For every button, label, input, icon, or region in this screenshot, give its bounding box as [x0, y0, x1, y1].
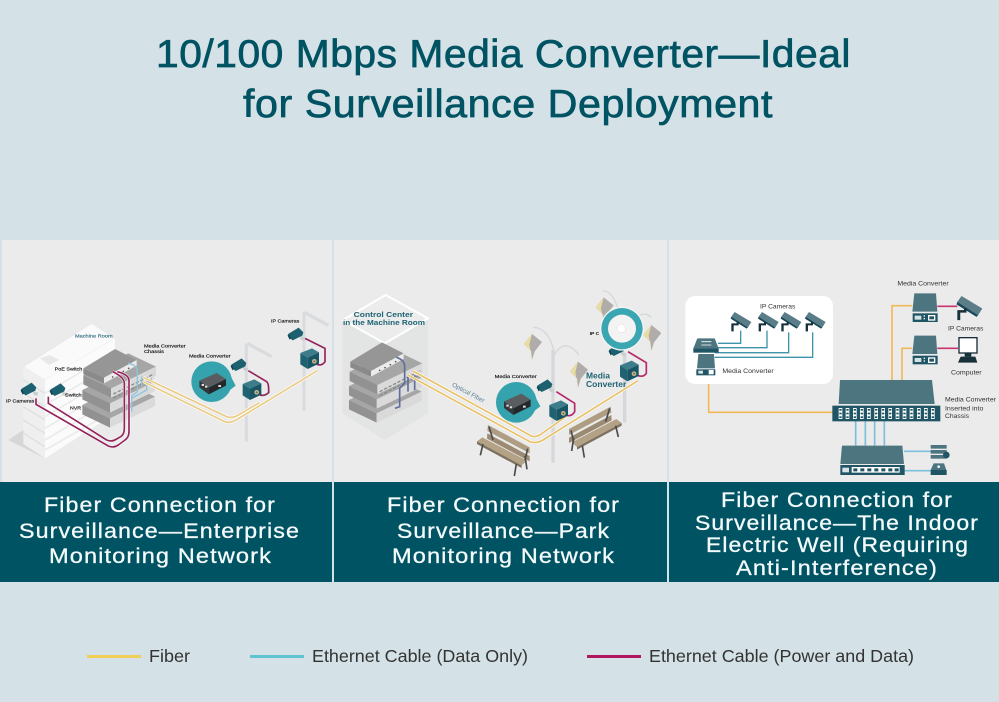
media converter boxes: [243, 348, 319, 400]
title: [156, 33, 851, 126]
ethernet cables: [395, 357, 415, 408]
diagram: enterprise network: [6, 312, 328, 458]
caption bar: enterprise: [0, 482, 332, 582]
legend: fiber: [87, 646, 190, 666]
labels: Machine Room: [75, 334, 113, 340]
labels: Media Converter: [722, 368, 774, 375]
labels: [343, 310, 626, 405]
labels: IP Cameras: [948, 325, 983, 332]
control center building: [342, 295, 428, 440]
labels: Chassis: [945, 413, 969, 420]
power cables: [556, 352, 646, 416]
server icon: [931, 445, 950, 459]
building: [8, 323, 115, 458]
switch in box: [693, 338, 719, 353]
bench left: [477, 425, 530, 476]
legend: ethernet data only: Ethernet Cable (Data Only): [312, 646, 528, 666]
labels: Converter: [586, 380, 626, 389]
labels: [6, 319, 300, 412]
fiber lines: [709, 306, 912, 412]
fiber cables: [143, 371, 317, 422]
media converter callout: [496, 382, 540, 423]
panel: indoor electric well: [669, 240, 999, 582]
legend: [87, 646, 914, 666]
ethernet cables: power and data: [36, 372, 129, 447]
power and data lines: [937, 306, 958, 348]
cameras: [21, 328, 305, 397]
labels: IP Cameras: [271, 319, 300, 325]
white camera box: [685, 296, 833, 384]
media converter boxes: [549, 361, 639, 421]
labels: Computer: [951, 370, 982, 377]
media converters right: [912, 293, 938, 364]
labels: IP Cameras: [760, 303, 795, 310]
labels: Media Converter: [945, 397, 996, 404]
legend: fiber: Fiber: [149, 646, 190, 666]
cameras: [537, 343, 626, 393]
panel: enterprise monitoring network: [0, 240, 332, 582]
labels: Switch: [65, 393, 82, 399]
labels: Media: [586, 372, 611, 381]
computer icon: [958, 338, 977, 363]
camera right: [956, 296, 982, 320]
cameras in box: [731, 312, 826, 331]
diagram: park network: [342, 291, 661, 476]
labels: IP C: [590, 331, 600, 337]
caption bar: park: Surveillance—Park: [397, 519, 610, 543]
labels: [722, 280, 996, 420]
labels: PoE Switch: [55, 367, 83, 373]
labels: Chassis: [144, 349, 165, 355]
caption bar: enterprise: Surveillance—Enterprise: [19, 519, 300, 543]
labels: NVR: [70, 406, 81, 412]
labels: Media Converter: [897, 280, 949, 287]
equipment stack: [82, 349, 156, 428]
caption bar: indoor: Electric Well (Requiring: [706, 533, 969, 557]
labels: IP Cameras: [6, 399, 35, 405]
labels: in the Machine Room: [343, 318, 425, 327]
caption bar: indoor: Surveillance—The Indoor: [695, 511, 979, 535]
bench right: [569, 407, 622, 458]
media converter in box: [696, 354, 715, 375]
data lines to cameras: [715, 331, 813, 357]
caption bar: indoor: Anti-Interference): [736, 556, 938, 580]
title: for Surveillance Deployment: [243, 83, 773, 126]
legend: ethernet power and data: Ethernet Cable (Power and Data): [649, 646, 914, 666]
labels: Control Center: [354, 310, 413, 319]
switch bottom: [840, 446, 905, 475]
labels: Inserted into: [945, 405, 984, 412]
ethernet cables: data: [128, 363, 147, 412]
labels: Media Converter: [189, 354, 231, 360]
data lines to chassis: [856, 421, 931, 471]
caption bar: enterprise: Fiber Connection for: [44, 493, 276, 517]
power cables at poles: [248, 338, 325, 395]
labels: Media Converter: [144, 344, 186, 350]
caption bar: park: Monitoring Network: [392, 544, 615, 568]
media converter callout: [191, 361, 236, 402]
access point callout: [600, 307, 644, 351]
storage icon: [931, 463, 947, 475]
title: 10/100 Mbps Media Converter—Ideal: [156, 33, 851, 76]
caption bar: indoor: Fiber Connection for: [721, 488, 953, 512]
poles and lamps: [524, 291, 661, 463]
fiber cables: [408, 371, 638, 443]
chassis: [832, 380, 940, 421]
equipment stack: [349, 342, 422, 423]
poles: [246, 312, 328, 442]
panel: park monitoring network: [334, 240, 667, 582]
caption bar: park: Fiber Connection for: [387, 493, 620, 517]
caption bar: indoor: [669, 482, 999, 582]
diagram: indoor network: [685, 280, 996, 475]
caption bar: enterprise: Monitoring Network: [49, 544, 272, 568]
labels: Media Converter: [495, 374, 537, 380]
labels: Optical Fiber: [451, 382, 486, 405]
caption bar: park: [334, 482, 667, 582]
